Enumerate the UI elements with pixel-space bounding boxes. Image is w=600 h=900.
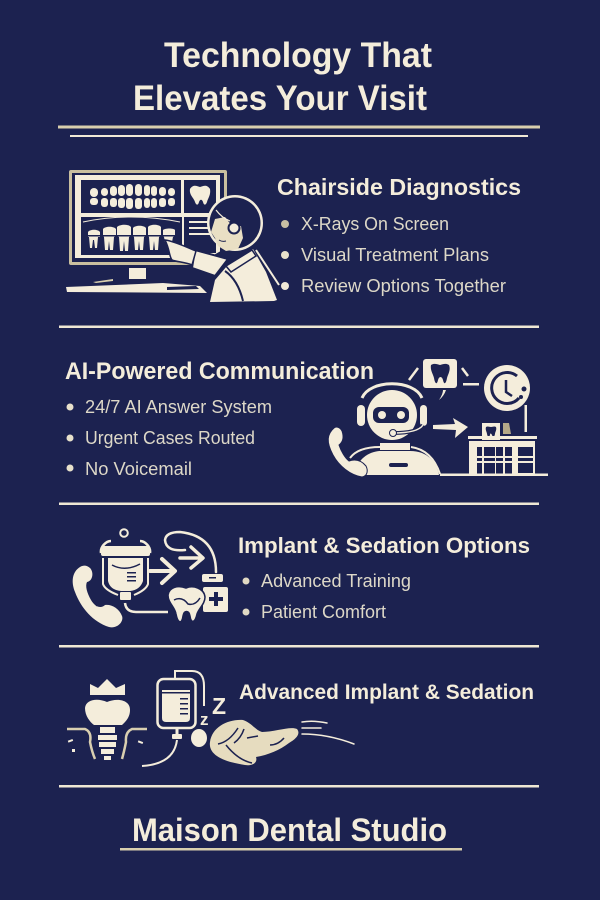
clinic building	[440, 423, 548, 476]
icon: implant, IV and sleeping patient	[67, 671, 354, 766]
bullet list: chairside: X-Rays On Screen	[301, 214, 449, 234]
icon: telephone	[328, 427, 367, 477]
bullet list: communication	[66, 397, 272, 479]
panel: advanced implant and sedation	[67, 671, 534, 766]
panel: implant and sedation options	[73, 529, 530, 627]
bullet list: communication: No Voicemail	[85, 459, 192, 479]
title: Technology That	[164, 36, 432, 75]
tooth speech bubble	[409, 359, 479, 400]
bullet list: chairside: Visual Treatment Plans	[301, 245, 489, 265]
heading: implant and sedation options: Implant & Sedation Options	[238, 533, 530, 558]
heading: advanced implant and sedation: Advanced Implant & Sedation	[239, 681, 534, 704]
icon: monitor with dentist	[66, 170, 282, 304]
panel: chairside diagnostics	[66, 170, 521, 304]
IV bag	[142, 671, 204, 766]
heading: chairside diagnostics: Chairside Diagnostics	[277, 174, 521, 200]
footer brand: Maison Dental Studio	[132, 812, 447, 848]
robot	[350, 384, 440, 475]
telephone	[73, 566, 122, 627]
arrow	[433, 418, 468, 438]
bullet list: implant	[242, 571, 411, 622]
icon: implant, IV and sleeping patient: z	[200, 710, 208, 729]
bullet list: chairside: Review Options Together	[301, 276, 506, 296]
bullet list: communication: Urgent Cases Routed	[85, 428, 255, 448]
bullet list: implant: Patient Comfort	[261, 602, 386, 622]
clock	[484, 365, 530, 432]
heading: AI-powered communication: AI-Powered Communication	[65, 358, 374, 385]
title	[133, 36, 432, 118]
icon: AI robot with clinic	[328, 359, 548, 477]
panel: AI-powered communication	[65, 358, 548, 479]
halo behind figure	[205, 238, 282, 304]
bullet list: communication: 24/7 AI Answer System	[85, 397, 272, 417]
bullet list: implant: Advanced Training	[261, 571, 411, 591]
bullet list: chairside	[281, 214, 506, 296]
dentist figure	[165, 195, 282, 304]
icon: implant, IV and sleeping patient: Z	[212, 693, 226, 719]
title: Elevates Your Visit	[133, 79, 427, 118]
sleeping patient	[191, 720, 354, 765]
icon: IV bag, phone and tooth kit	[73, 529, 228, 627]
